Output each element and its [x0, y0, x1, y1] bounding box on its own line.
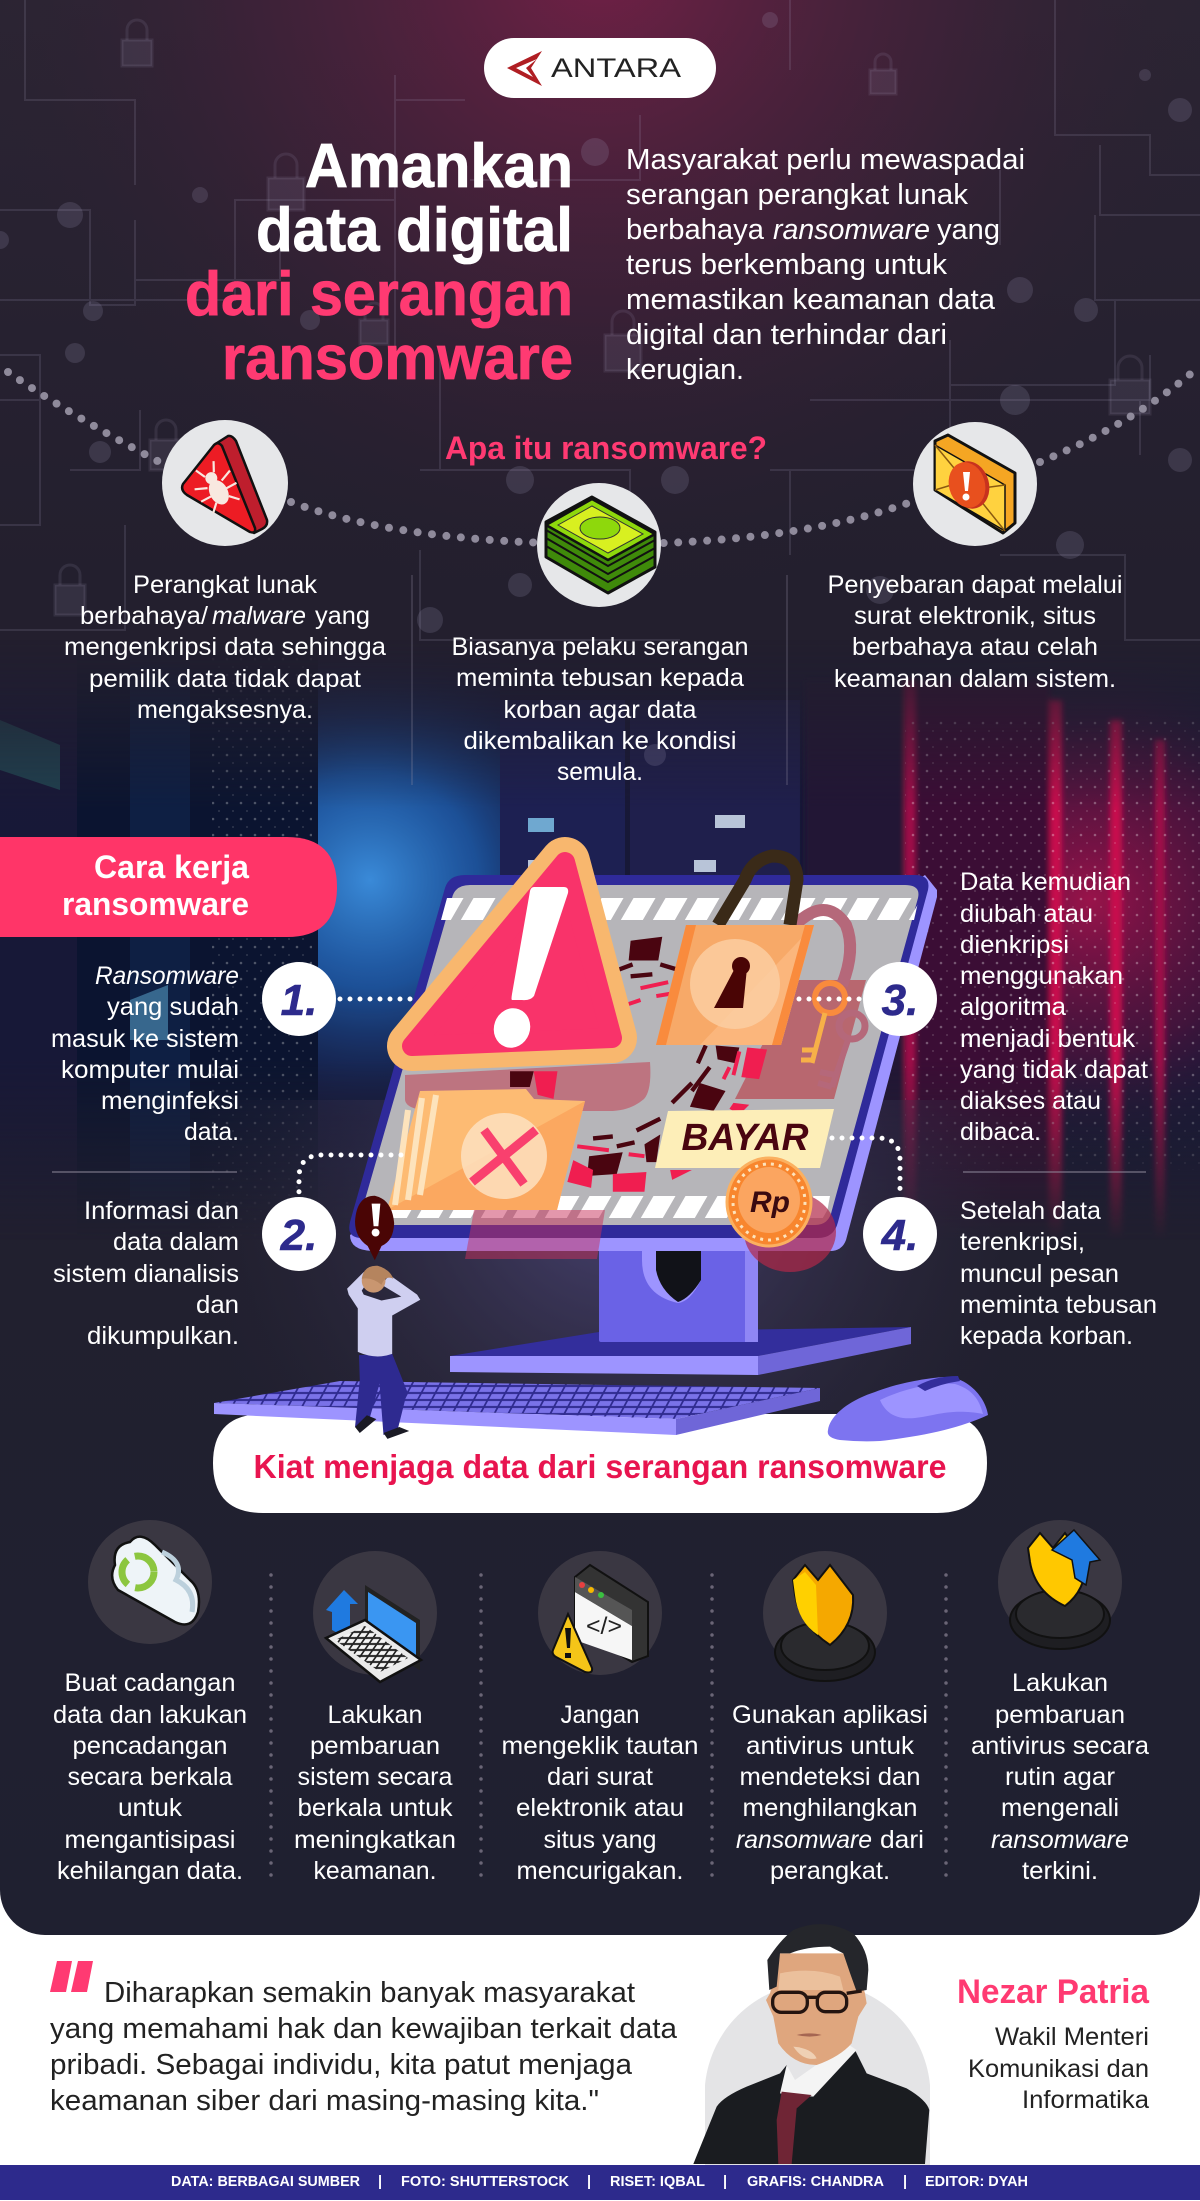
- text block: definition left: mengaksesnya.: [137, 696, 313, 724]
- text block: tip 1: [53, 1669, 247, 1885]
- text block: tip 1: untuk: [118, 1794, 183, 1822]
- text block: definition left: pemilik data tidak dapat: [89, 665, 361, 693]
- glasses: [773, 1991, 862, 2012]
- text block: definition center: Biasanya pelaku serangan: [452, 633, 748, 661]
- icon: warning envelope: [913, 422, 1037, 546]
- icon: red triangle bug: [162, 420, 288, 546]
- text block: tip 1: pencadangan: [72, 1732, 228, 1760]
- text block: definition center: dikembalikan ke kondisi: [464, 727, 736, 755]
- text block: step 3: dibaca.: [960, 1118, 1041, 1146]
- speaker role: Informatika: [1022, 2086, 1149, 2114]
- icon: BAYAR sign: BAYAR: [682, 1117, 809, 1159]
- intro text block: [626, 144, 1025, 386]
- speech bubble alert: [355, 1196, 394, 1260]
- text block: step 1: [51, 962, 239, 1146]
- text block: tip 2: keamanan.: [314, 1857, 436, 1885]
- text block: step 3: diakses atau: [960, 1087, 1101, 1115]
- step number 4: [863, 1197, 937, 1271]
- title: Amankan: [305, 132, 573, 201]
- text block: definition center: semula.: [557, 758, 643, 786]
- text block: tip 4: mendeteksi dan: [740, 1763, 920, 1791]
- pill: Cara kerja ransomware: Cara kerja: [94, 849, 249, 885]
- hair: [767, 1924, 868, 1992]
- text block: definition left: Perangkat lunak: [133, 571, 317, 599]
- footer credits bar: |: [723, 2174, 727, 2190]
- portrait: Nezar Patria: [693, 1924, 930, 2165]
- text block: tip 1: data dan lakukan: [53, 1701, 247, 1729]
- text block: definition center: korban agar data: [504, 696, 697, 724]
- icon: Rupiah coin: [727, 1158, 811, 1246]
- footer credits bar: |: [378, 2174, 382, 2190]
- text block: step 3: Data kemudian: [960, 868, 1131, 896]
- intro text block: memastikan keamanan data: [626, 284, 995, 316]
- speaker name: [957, 1973, 1150, 2114]
- background: server room photo: [0, 640, 1200, 1240]
- text block: definition right: keamanan dalam sistem.: [834, 665, 1116, 693]
- text block: step 2: data dalam: [113, 1228, 239, 1256]
- footer credits bar: RISET: IQBAL: [610, 2174, 705, 2190]
- step number 1: 1.: [281, 976, 317, 1025]
- background: circuit lines and padlocks: [0, 0, 1200, 766]
- pill: Cara kerja ransomware: ransomware: [62, 886, 249, 922]
- dotted connection curve: [8, 371, 1194, 544]
- screen hazard stripes: [384, 898, 919, 1218]
- text block: step 4: [960, 1197, 1157, 1350]
- icon: cloud backup: [88, 1520, 212, 1644]
- footer credits bar: |: [587, 2174, 591, 2190]
- text block: tip 3: situs yang: [544, 1826, 656, 1854]
- text block: tip 5: pembaruan: [995, 1701, 1125, 1729]
- text block: tip 3: dari surat: [547, 1763, 653, 1791]
- title: data digital: [256, 196, 573, 265]
- intro text block: berbahaya: [626, 214, 764, 246]
- icon: BAYAR sign: [655, 1109, 834, 1168]
- text block: step 2: dan: [196, 1291, 239, 1319]
- keyboard: [214, 1381, 820, 1435]
- text block: tip 2: meningkatkan: [294, 1826, 456, 1854]
- translucent pink shapes: [405, 910, 866, 1272]
- text block: step 3: yang tidak dapat: [960, 1056, 1148, 1084]
- step number 2: [262, 1197, 336, 1271]
- icon: money stack: [537, 483, 661, 607]
- text block: definition right: berbahaya atau celah: [852, 633, 1098, 661]
- intro text block: yang: [937, 214, 1000, 246]
- text block: step 2: sistem dianalisis: [53, 1260, 239, 1288]
- step number 3: 3.: [882, 976, 918, 1025]
- text block: tip 4: antivirus untuk: [746, 1732, 915, 1760]
- text block: tip 3: Jangan: [560, 1701, 640, 1729]
- footer credits bar: [0, 2165, 1200, 2200]
- icon: code window with warning: </>: [586, 1613, 622, 1640]
- text block: step 1: data.: [184, 1118, 239, 1146]
- text block: tip 2: pembaruan: [310, 1732, 440, 1760]
- text block: step 1: menginfeksi: [101, 1087, 239, 1115]
- text block: tip 4: dari: [880, 1826, 924, 1854]
- title: [185, 132, 573, 393]
- intro text block: terus berkembang untuk: [626, 249, 948, 281]
- heading: Apa itu ransomware: Apa itu ransomware?: [445, 430, 767, 466]
- background: faint padlock icons: [55, 20, 1150, 615]
- text block: definition center: meminta tebusan kepada: [456, 664, 744, 692]
- text block: step 3: diubah atau: [960, 900, 1093, 928]
- text block: definition left: mengenkripsi data sehingga: [64, 633, 386, 661]
- text block: step 3: algoritma: [960, 993, 1066, 1021]
- text block: definition left: yang: [315, 602, 370, 630]
- text block: tip 2: Lakukan: [328, 1701, 422, 1729]
- icon: computer mouse: [828, 1376, 988, 1441]
- step number 1: [262, 962, 336, 1036]
- text block: step 3: menggunakan: [960, 962, 1123, 990]
- text block: step 4: terenkripsi,: [960, 1228, 1085, 1256]
- text block: tip 4: perangkat.: [770, 1857, 890, 1885]
- text block: definition left: berbahaya/: [80, 602, 208, 630]
- white banner pill: [213, 1381, 987, 1513]
- monitor stand: [450, 1245, 911, 1375]
- text block: tip 2: sistem secara: [298, 1763, 453, 1791]
- ransomware swirl fragments: [510, 937, 767, 1192]
- intro text block: digital dan terhindar dari: [626, 319, 947, 351]
- footer credits bar: |: [903, 2174, 907, 2190]
- footer credits bar: EDITOR: DYAH: [925, 2174, 1028, 2190]
- icon: antivirus update: [998, 1520, 1122, 1649]
- icon: folder with X: [387, 1089, 585, 1210]
- column dividers: [412, 575, 787, 785]
- banner heading: Kiat menjaga data dari serangan ransomware: [254, 1448, 946, 1485]
- text block: step 2: [53, 1197, 239, 1350]
- intro text block: serangan perangkat lunak: [626, 179, 969, 211]
- title: dari serangan: [185, 260, 573, 329]
- text block: tip 5: antivirus secara: [971, 1732, 1149, 1760]
- text block: tip 3: elektronik atau: [516, 1794, 684, 1822]
- icon: antivirus shield: [763, 1551, 887, 1681]
- text block: tip 3: mencurigakan.: [516, 1857, 684, 1885]
- text block: tip 3: mengeklik tautan: [502, 1732, 698, 1760]
- text block: step 2: dikumpulkan.: [87, 1322, 239, 1350]
- quote text: keamanan siber dari masing-masing kita.": [50, 2085, 599, 2117]
- quote text: [50, 1977, 678, 2117]
- quote text: pribadi. Sebagai individu, kita patut menjaga: [50, 2049, 633, 2081]
- text block: step 4: kepada korban.: [960, 1322, 1133, 1350]
- text block: tip 1: secara berkala: [68, 1763, 233, 1791]
- text block: step 1: yang sudah: [107, 993, 239, 1021]
- text block: step 1: Ransomware: [95, 962, 239, 990]
- text block: step 1: masuk ke sistem: [51, 1025, 239, 1053]
- text block: tip 4: ransomware: [736, 1826, 872, 1854]
- dotted connectors for steps: [299, 999, 900, 1197]
- text block: tip 1: Buat cadangan: [64, 1669, 235, 1697]
- text block: tip 5: Lakukan: [1012, 1669, 1108, 1697]
- face: [766, 1953, 867, 2065]
- step number 4: 4.: [881, 1211, 918, 1260]
- text block: tip 5: ransomware: [991, 1826, 1129, 1854]
- tip dividers: [271, 1575, 946, 1880]
- text block: step 4: Setelah data: [960, 1197, 1101, 1225]
- text block: definition right: Penyebaran dapat melalui: [828, 571, 1122, 599]
- speaker role: Wakil Menteri: [995, 2023, 1149, 2051]
- icon: Rupiah coin: Rp: [750, 1186, 790, 1219]
- monitor body: [349, 875, 937, 1251]
- text block: definition right: [828, 571, 1122, 693]
- text block: definition left: malware: [212, 602, 306, 630]
- text block: tip 5: terkini.: [1022, 1857, 1098, 1885]
- text block: tip 1: kehilangan data.: [57, 1857, 243, 1885]
- icon: Antara arrow: [507, 51, 542, 86]
- text block: definition left: [64, 571, 386, 724]
- text block: step 1: komputer mulai: [61, 1056, 239, 1084]
- text block: step 4: meminta tebusan: [960, 1291, 1157, 1319]
- footer credits bar: DATA: BERBAGAI SUMBER: [171, 2174, 361, 2190]
- icon: laptop update: [313, 1551, 437, 1682]
- background: purple glow behind computer: [200, 1100, 1000, 1410]
- text block: step 4: muncul pesan: [960, 1260, 1119, 1288]
- text block: tip 4: Gunakan aplikasi: [732, 1701, 928, 1729]
- logo pill: ANTARA: [484, 38, 716, 98]
- text block: tip 4: [732, 1701, 928, 1885]
- icon: quotation mark: [50, 1961, 93, 1992]
- icon: alert triangle: [412, 862, 612, 1053]
- quote text: Diharapkan semakin banyak masyarakat: [104, 1977, 635, 2009]
- text block: tip 3: [502, 1701, 698, 1885]
- title: ransomware: [222, 324, 573, 393]
- suit: [693, 2050, 929, 2164]
- speaker role: Komunikasi dan: [968, 2055, 1149, 2083]
- text block: tip 2: berkala untuk: [298, 1794, 453, 1822]
- step number 2: 2.: [280, 1211, 317, 1260]
- text block: tip 1: mengantisipasi: [64, 1826, 236, 1854]
- quote text: yang memahami hak dan kewajiban terkait data: [50, 2013, 678, 2045]
- figure: worried man: [347, 1196, 420, 1439]
- intro text block: Masyarakat perlu mewaspadai: [626, 144, 1025, 176]
- pill: Cara kerja ransomware: [0, 837, 337, 937]
- text block: tip 2: [294, 1701, 456, 1885]
- text block: tip 4: menghilangkan: [742, 1794, 918, 1822]
- text block: tip 5: [971, 1669, 1149, 1885]
- logo wordmark: ANTARA: [551, 53, 681, 83]
- text block: step 3: menjadi bentuk: [960, 1025, 1136, 1053]
- icon: key: [801, 983, 865, 1087]
- footer credits bar: GRAFIS: CHANDRA: [747, 2174, 885, 2190]
- text block: step 2: Informasi dan: [84, 1197, 239, 1225]
- illustration: computer with ransomware screen: [349, 856, 937, 1375]
- step number 3: [863, 962, 937, 1036]
- speaker name: Nezar Patria: [957, 1973, 1150, 2011]
- icon: code window with warning: [538, 1551, 662, 1675]
- text block: definition right: surat elektronik, situs: [854, 602, 1096, 630]
- intro text block: kerugian.: [626, 354, 744, 386]
- footer credits bar: FOTO: SHUTTERSTOCK: [401, 2174, 570, 2190]
- icon: padlock: [656, 856, 814, 1045]
- text block: tip 5: rutin agar: [1005, 1763, 1115, 1791]
- text block: definition center: [452, 633, 748, 786]
- intro text block: ransomware: [773, 214, 930, 246]
- text block: tip 5: mengenali: [1001, 1794, 1119, 1822]
- speaker role: [968, 2023, 1149, 2114]
- text block: step 3: dienkripsi: [960, 931, 1069, 959]
- text block: step 3: [960, 868, 1148, 1146]
